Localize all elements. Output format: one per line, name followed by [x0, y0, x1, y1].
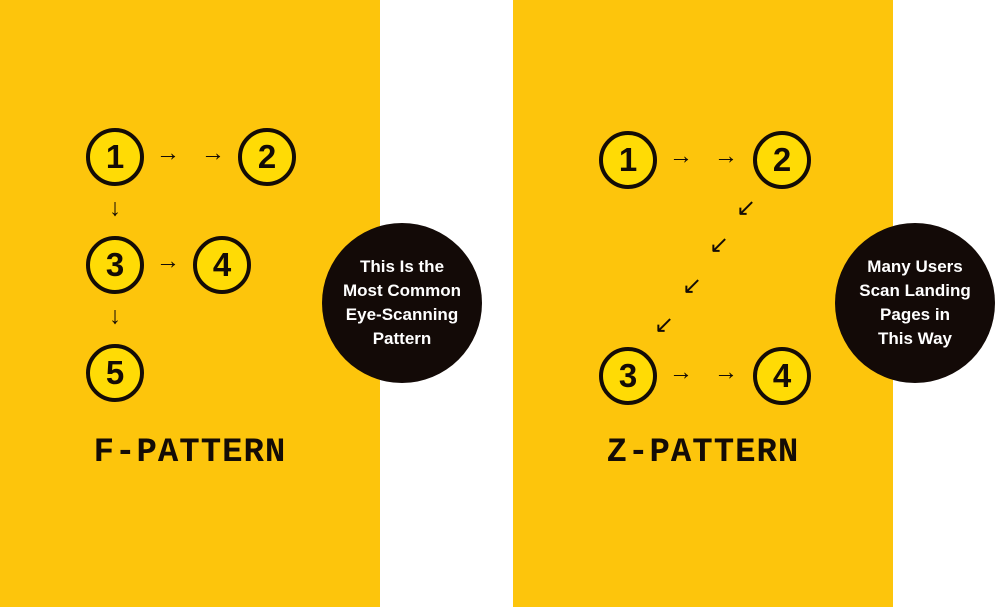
circle 1 [86, 128, 144, 186]
circle 3: 3 [106, 246, 124, 283]
circle 1: 1 [106, 138, 124, 175]
arrow down: ↓ [109, 303, 121, 330]
circle 2 [238, 128, 296, 186]
circle 2 [753, 131, 811, 189]
panel: Z-pattern [513, 0, 893, 607]
circle 2: 2 [773, 141, 791, 178]
circle 4: 4 [773, 357, 791, 394]
callout: landing pages [835, 223, 995, 383]
arrow: → [156, 248, 180, 275]
diagonal arrow: ↙ [709, 232, 729, 259]
callout: landing pages: Scan Landing [859, 281, 971, 300]
circle 1: 1 [619, 141, 637, 178]
callout: most common [322, 223, 482, 383]
circle 5 [86, 344, 144, 402]
circle 4: 4 [213, 246, 231, 283]
circle 1 [599, 131, 657, 189]
circle 2: 2 [258, 138, 276, 175]
callout: most common: Pattern [373, 329, 431, 348]
circle 3: 3 [619, 357, 637, 394]
callout: landing pages: Pages in [880, 305, 950, 324]
arrow: → [156, 140, 180, 167]
callout: most common: Eye-Scanning [346, 305, 458, 324]
diagonal arrow: ↙ [682, 273, 702, 300]
title F-pattern: F-PATTERN [94, 434, 286, 472]
title Z-pattern: Z-PATTERN [607, 434, 799, 472]
callout: most common: This Is the [360, 257, 444, 276]
circle 5: 5 [106, 354, 124, 391]
arrow: → [714, 359, 738, 386]
arrow: → [201, 140, 225, 167]
circle 4 [193, 236, 251, 294]
circle 3 [86, 236, 144, 294]
diagonal arrow: ↙ [736, 195, 756, 222]
arrow: → [669, 359, 693, 386]
circle 3 [599, 347, 657, 405]
arrow: → [714, 143, 738, 170]
diagonal arrow: ↙ [654, 312, 674, 339]
callout: most common: Most Common [343, 281, 461, 300]
arrow down: ↓ [109, 195, 121, 222]
arrow: → [669, 143, 693, 170]
callout: landing pages: This Way [878, 329, 952, 348]
panel: F-pattern [0, 0, 380, 607]
circle 4 [753, 347, 811, 405]
callout: landing pages: Many Users [867, 257, 963, 276]
